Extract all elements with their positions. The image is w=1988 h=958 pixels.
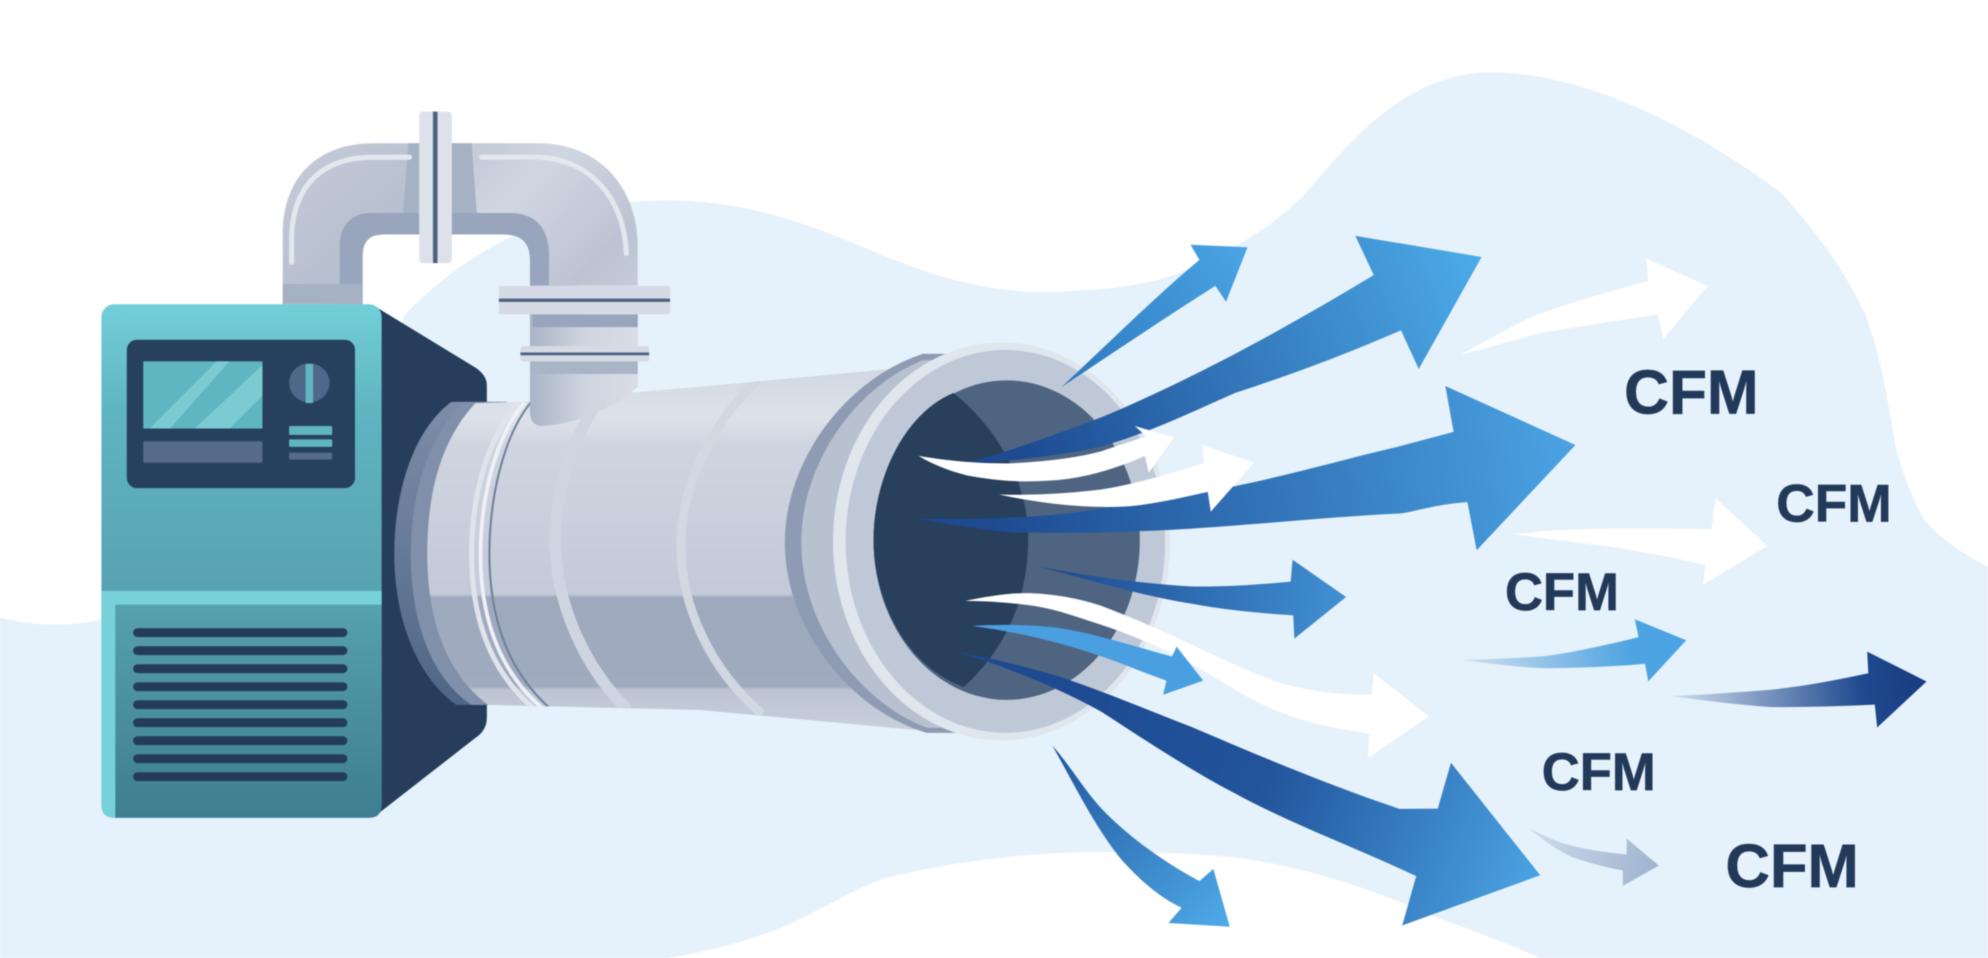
outlet: opening [874,380,1140,700]
arrow: white middle right [1514,498,1767,585]
arrow: white inner lower [999,445,1254,512]
pipe: upper collar flange [499,286,670,314]
label: CFM upper: CFM [1624,358,1759,427]
duct outlet [785,342,1170,740]
ventilation grille [133,628,347,781]
label: CFM right: CFM [1776,475,1892,534]
control knob [289,363,330,403]
arrow: large blue middle [917,386,1575,550]
arrow: white upper right [1461,259,1708,354]
outlet: dark collar ring [785,354,1014,733]
pipe: lower collar flange [520,346,649,361]
arrow: fading dark blue [1669,652,1927,728]
pipe: right elbow [446,143,638,426]
arrow: small blue upper [1061,245,1248,387]
machine: front panel [101,304,382,818]
arrow: white inner upper [919,426,1174,481]
arrow: fading light blue [1461,619,1686,681]
label: CFM bottom: CFM [1726,832,1859,901]
machine: side panel [378,308,487,814]
label: CFM lower: CFM [1542,743,1656,802]
arrow: large blue lower [956,652,1540,926]
pipe: left elbow [283,143,431,304]
arrow: large blue upper [967,236,1482,463]
outlet: flange face [833,342,1170,740]
label: CFM middle: CFM [1505,563,1619,622]
arrow: light blue inner [972,625,1203,695]
control panel [127,340,355,488]
arrow: blue centre [1037,560,1346,639]
arrow: pale lower right [1526,827,1659,886]
arrow: blue lower small [1052,746,1230,927]
duct: tube body [427,365,932,732]
arrow: long white lower [965,593,1429,758]
duct: main tube [394,365,932,732]
display screen [143,361,262,429]
duct: rear collar [394,402,507,705]
pipe: top flange [419,112,452,263]
